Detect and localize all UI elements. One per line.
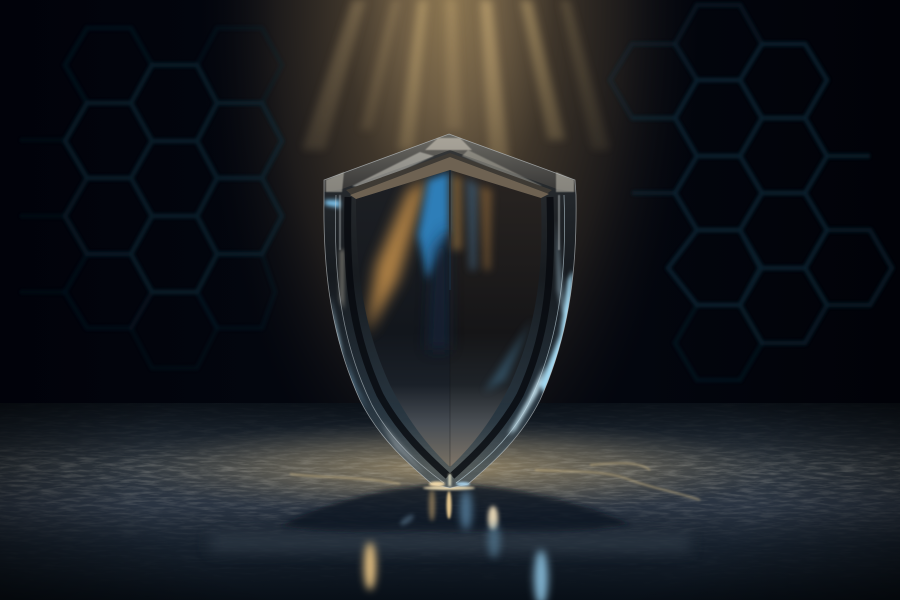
bevel facets: [326, 138, 574, 192]
blue streak: [418, 172, 449, 280]
outer edge: [324, 134, 576, 488]
right streaks: [452, 175, 462, 250]
inner panel: [350, 165, 550, 470]
light glow behind shield: [190, 0, 710, 404]
floor vignette: [0, 403, 900, 600]
background wall: [0, 0, 900, 404]
floor texture: [0, 428, 900, 534]
hexagon grid left: [20, 28, 282, 368]
floor lower sheen: [210, 534, 690, 552]
shield shadow: [280, 485, 630, 532]
floor cracks: [290, 463, 700, 500]
floor: [0, 403, 900, 600]
gold streak: [366, 178, 428, 335]
shield rim body: [324, 134, 576, 488]
centre ridge: [449, 170, 451, 467]
floor glow: [110, 420, 790, 516]
hexagon grid right: [610, 5, 892, 380]
brown inner bevel: [346, 153, 552, 199]
rim highlights: [325, 195, 573, 483]
reflections on floor: [364, 486, 548, 600]
light rays: [302, 0, 610, 170]
top bevel: [324, 134, 575, 192]
base glint: [429, 474, 470, 486]
glass shield: [324, 134, 576, 488]
